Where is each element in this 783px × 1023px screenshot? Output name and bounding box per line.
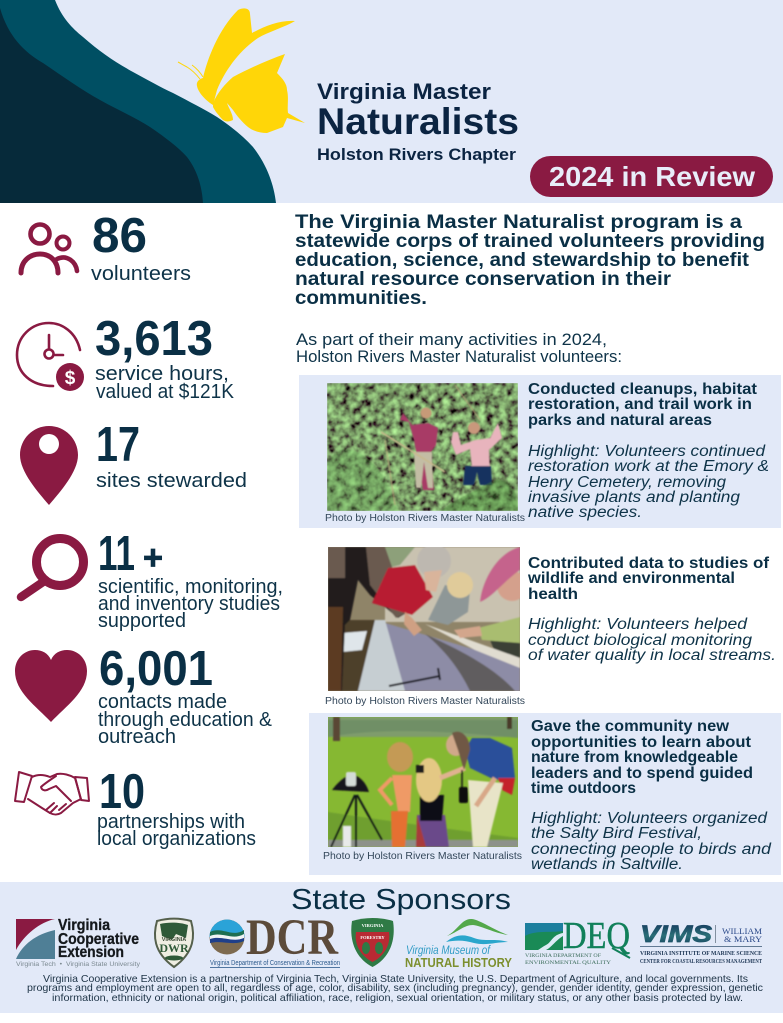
- nondiscrimination statement: information, ethnicity or national origin, political affiliation, race, religion, sexual orientation, or military status, or any other basis protected by law.: [52, 992, 743, 1004]
- title: [317, 79, 519, 164]
- logo: Virginia DCR: Virginia Department of Conservation & Recreation: [210, 960, 340, 967]
- caption: Photo by Holston Rivers Master Naturalists: [325, 512, 525, 524]
- intro statement: [295, 212, 765, 309]
- nondiscrimination statement: programs and employment are open to all, regardless of age, color, disability, sex (including pregnancy), gender, gender identity, gender expression, genetic: [27, 982, 763, 994]
- highlight text: native species.: [528, 504, 642, 521]
- photo: volunteers in brush: [327, 383, 518, 511]
- header teal wave: [0, 0, 276, 203]
- stat: service hours: 3,613: [95, 312, 213, 366]
- highlight text: connecting people to birds and: [531, 841, 773, 858]
- highlight text: invasive plants and planting: [528, 489, 740, 506]
- stat: contacts made: 6,001: [99, 642, 213, 696]
- stat: studies supported: supported: [98, 610, 186, 632]
- icon: magnifying glass: [21, 538, 84, 597]
- highlight text: Highlight: Volunteers helped: [528, 616, 749, 633]
- stat: volunteers: [21, 209, 191, 285]
- stat: contacts made: contacts made: [98, 691, 227, 713]
- header background: [0, 0, 783, 203]
- intro statement: The Virginia Master Naturalist program is a: [295, 212, 742, 233]
- highlight text: Highlight: Volunteers organized: [531, 810, 769, 827]
- stat: studies supported: and inventory studies: [98, 593, 280, 615]
- stat: contacts made: through education &: [98, 709, 273, 731]
- panel heading: nature from knowledgeable: [531, 749, 738, 766]
- highlight text: wetlands in Saltville.: [531, 856, 683, 873]
- logo: VIMS William and Mary: WILLIAM: [722, 926, 762, 936]
- logo: VIMS William and Mary: [640, 921, 762, 965]
- logo: Virginia Museum of Natural History: NATURAL HISTORY: [405, 956, 513, 970]
- panel heading: parks and natural areas: [528, 412, 712, 429]
- logo: VIMS William and Mary: VIRGINIA INSTITUTE OF MARINE SCIENCE: [640, 950, 762, 957]
- sponsors heading: State Sponsors: [291, 884, 511, 916]
- highlight text: restoration work at the Emory &: [528, 458, 769, 475]
- panel heading: restoration, and trail work in: [528, 396, 752, 413]
- logo: Virginia DEQ: ENVIRONMENTAL QUALITY: [525, 960, 611, 966]
- icon: map pin: [20, 426, 78, 505]
- stat: service hours: service hours,: [95, 363, 229, 385]
- stat: partnerships: [15, 765, 256, 850]
- caption: Photo by Holston Rivers Master Naturalists: [323, 850, 522, 862]
- logo: Virginia DWR: DWR: [159, 941, 189, 955]
- stat: studies supported: [21, 527, 283, 632]
- logo: Virginia Cooperative Extension: Cooperative: [58, 931, 139, 948]
- logo: Virginia DEQ: [525, 915, 630, 966]
- stat: contacts made: [15, 642, 273, 748]
- panel heading: [527, 555, 770, 603]
- panel heading: Conducted cleanups, habitat: [528, 381, 757, 398]
- highlight text: Henry Cemetery, removing: [528, 474, 726, 491]
- icon: clock with dollar: $: [65, 368, 76, 389]
- activities lead-in: [296, 330, 622, 366]
- logo: VIMS William and Mary: VIMS: [640, 921, 712, 948]
- panel heading: Gave the community new: [531, 718, 730, 735]
- activities lead-in: Holston Rivers Master Naturalist volunteers:: [296, 347, 622, 366]
- stat: volunteers: volunteers: [91, 263, 191, 285]
- highlight text: [531, 810, 773, 873]
- panel heading: [531, 718, 753, 797]
- logo: Virginia Cooperative Extension: Extension: [58, 944, 124, 961]
- stat: service hours: [17, 312, 235, 403]
- header dark wave: [0, 8, 203, 203]
- highlight text: of water quality in local streams.: [528, 647, 776, 664]
- caption: Photo by Holston Rivers Master Naturalists: [325, 695, 525, 707]
- stat: sites stewarded: sites stewarded: [96, 470, 247, 492]
- stat: studies supported: +: [143, 539, 163, 577]
- highlight text: Highlight: Volunteers continued: [528, 443, 767, 460]
- panel heading: time outdoors: [531, 780, 636, 797]
- stat: sites stewarded: 17: [96, 418, 140, 472]
- highlight text: [528, 443, 769, 521]
- photo: stream monitoring: [328, 544, 527, 691]
- stat: studies supported: 11: [98, 527, 135, 581]
- title: Virginia Master: [317, 79, 491, 104]
- panel heading: opportunities to learn about: [531, 734, 751, 751]
- stat: sites stewarded: [20, 418, 247, 505]
- panel: cleanups: [299, 375, 781, 528]
- logo: Virginia DCR: DCR: [246, 910, 339, 966]
- logo: Virginia Cooperative Extension: Virginia Tech • Virginia State University: [16, 962, 140, 968]
- photo: children birding: [328, 717, 518, 847]
- logo: Virginia Forestry: FORESTRY: [360, 935, 385, 940]
- nondiscrimination statement: Virginia Cooperative Extension is a partnership of Virginia Tech, Virginia State University, the U.S. Department of Agriculture, and local governments. Its: [43, 973, 748, 985]
- icon: heart: [15, 650, 87, 722]
- panel: state sponsors: [0, 882, 783, 1013]
- stat: partnerships: partnerships with: [97, 811, 245, 833]
- icon: yellow butterfly: [178, 8, 305, 133]
- logo: Virginia DEQ: DEQ: [563, 915, 630, 957]
- logo: Virginia DWR: VIRGINIA: [162, 937, 186, 943]
- icon: clock with dollar: [17, 323, 84, 391]
- panel heading: health: [528, 586, 578, 603]
- icon: people: [21, 224, 77, 273]
- logo: Virginia Museum of Natural History: [405, 919, 513, 970]
- logo: Virginia Forestry: [351, 918, 394, 967]
- title: Holston Rivers Chapter: [317, 145, 516, 164]
- logo: Virginia Museum of Natural History: Virginia Museum of: [406, 945, 492, 957]
- logo: Virginia DWR: [155, 919, 193, 967]
- logo: VIMS William and Mary: & MARY: [724, 934, 762, 944]
- panel: community: [309, 713, 781, 875]
- nondiscrimination statement: [27, 973, 763, 1004]
- stat: volunteers: 86: [92, 209, 147, 263]
- intro statement: communities.: [295, 288, 427, 309]
- panel: data: [325, 544, 776, 707]
- title: Naturalists: [317, 101, 519, 142]
- highlight text: conduct biological monitoring: [528, 632, 752, 649]
- logo: Virginia DEQ: VIRGINIA DEPARTMENT OF: [525, 953, 601, 959]
- panel heading: leaders and to spend guided: [531, 765, 753, 782]
- intro statement: natural resource conservation in their: [295, 269, 672, 290]
- logo: Virginia Cooperative Extension: Virginia: [58, 917, 110, 934]
- panel heading: Contributed data to studies of: [528, 555, 770, 572]
- stat: service hours: valued at $121K: [96, 381, 235, 403]
- stat: studies supported: scientific, monitoring,: [98, 576, 283, 598]
- panel heading: wildlife and environmental: [527, 570, 735, 587]
- activities lead-in: As part of their many activities in 2024,: [296, 330, 607, 349]
- panel heading: [528, 381, 757, 429]
- logo: Virginia Forestry: VIRGINIA: [362, 923, 384, 928]
- badge: 2024 in Review: [530, 156, 773, 197]
- stat: contacts made: outreach: [98, 726, 176, 748]
- highlight text: [528, 616, 776, 664]
- intro statement: education, science, and stewardship to benefit: [295, 250, 750, 271]
- intro statement: statewide corps of trained volunteers providing: [295, 231, 765, 252]
- highlight text: the Salty Bird Festival,: [531, 825, 702, 842]
- logo: Virginia Cooperative Extension: [16, 917, 140, 968]
- stat: partnerships: 10: [99, 765, 145, 819]
- stat: partnerships: local organizations: [97, 828, 256, 850]
- logo: Virginia DCR: [210, 910, 340, 968]
- badge: 2024 in Review: 2024 in Review: [549, 161, 755, 192]
- icon: handshake: [15, 772, 89, 815]
